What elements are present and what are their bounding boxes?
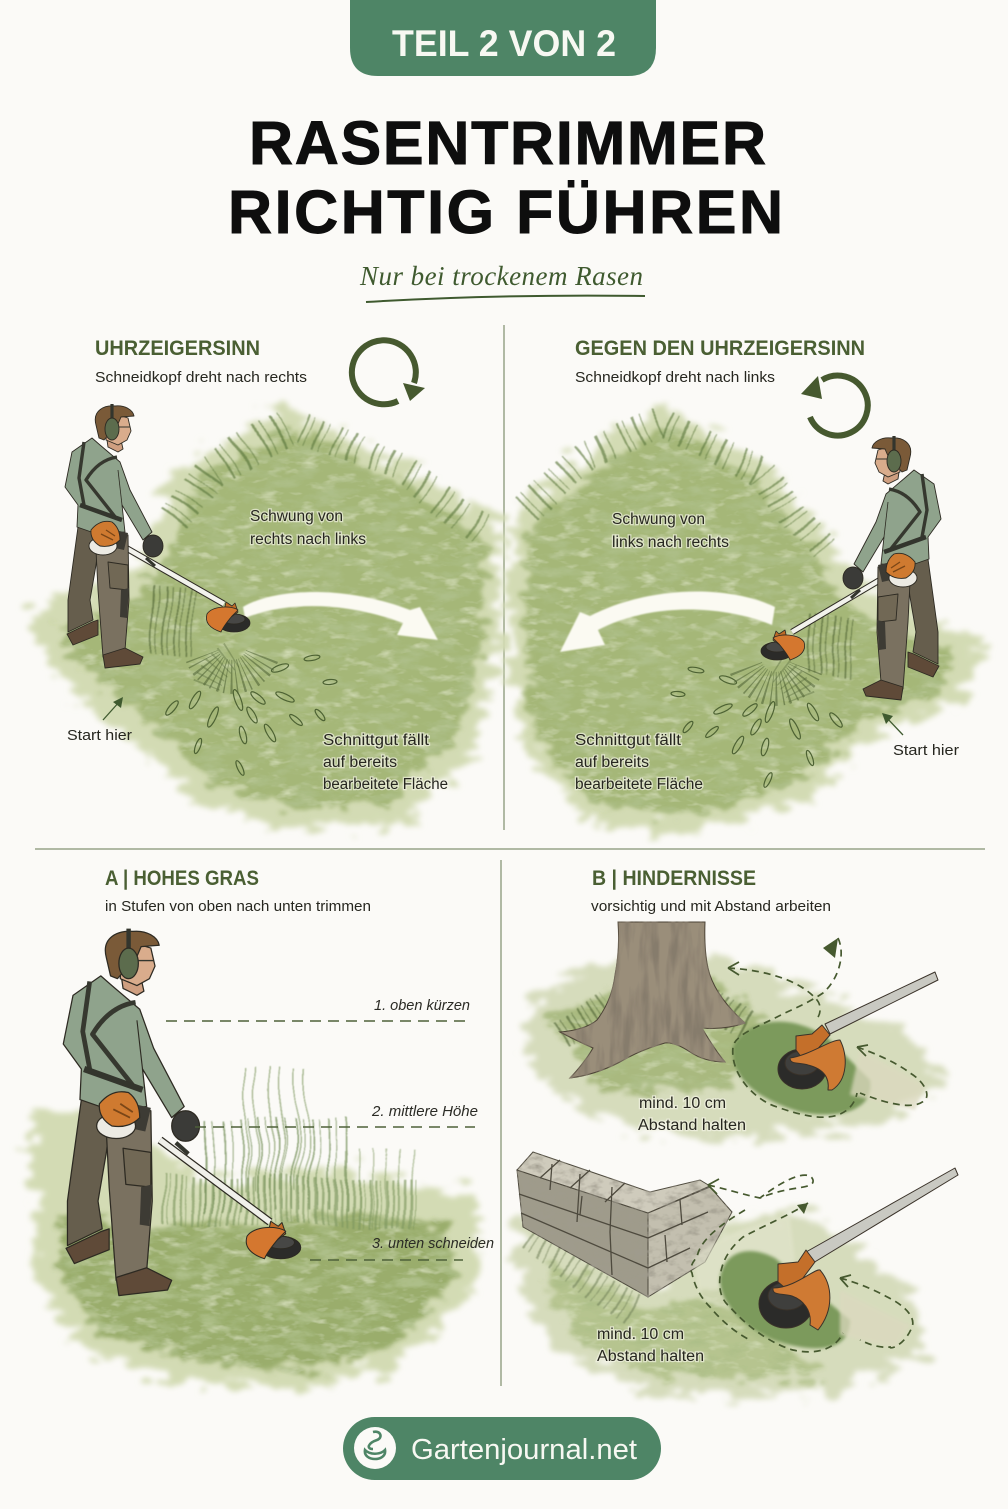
- lawn and tall grass: [30, 1105, 480, 1392]
- label: keep distance at wall: Abstand halten: [597, 1348, 704, 1365]
- label: clippings: auf bereits: [323, 754, 397, 771]
- label: keep distance at tree: [638, 1095, 746, 1134]
- paths around tree: [728, 938, 927, 1117]
- panel: A tall grass: [30, 867, 494, 1392]
- icon: counter-clockwise arrow: [801, 376, 868, 436]
- panel: Gegen den Uhrzeigersinn: [510, 337, 985, 835]
- heading: B obstacles: B | HINDERNISSE: [592, 867, 756, 890]
- step 1: top: 1. oben kürzen: [374, 997, 470, 1014]
- heading: Gegen den Uhrzeigersinn: GEGEN DEN UHRZEIGERSINN: [575, 337, 865, 360]
- label: keep distance at tree: mind. 10 cm: [639, 1095, 726, 1112]
- icon: clockwise arrow: [352, 340, 425, 404]
- label: swing: [250, 508, 366, 548]
- label: swing: rechts nach links: [250, 531, 366, 548]
- person with trimmer: [65, 404, 250, 668]
- header tab: part indicator: TEIL 2 VON 2: [392, 23, 616, 64]
- header tab: part indicator: [350, 0, 656, 76]
- illustration: tree obstacle: [525, 922, 945, 1140]
- label: clippings: Schnittgut fällt: [575, 732, 682, 749]
- heading: Uhrzeigersinn: UHRZEIGERSINN: [95, 337, 260, 360]
- person with trimmer: [63, 929, 301, 1296]
- step 2: middle: 2. mittlere Höhe: [371, 1103, 478, 1120]
- text: cutting head direction left: Schneidkopf dreht nach links: [575, 369, 775, 386]
- subtitle with hand-drawn underline: Nur bei trockenem Rasen: [359, 261, 643, 291]
- text: website: Gartenjournal.net: [411, 1434, 637, 1466]
- heading: A tall grass: A | HOHES GRAS: [105, 867, 259, 890]
- arrow: swing direction: [243, 592, 438, 640]
- title: RICHTIG FÜHREN: [228, 178, 783, 246]
- footer brand pill: [343, 1417, 661, 1480]
- label: clippings: [323, 732, 448, 793]
- label: start here with arrow: Start hier: [893, 742, 959, 759]
- label: keep distance at wall: [597, 1326, 704, 1365]
- title: RASENTRIMMER: [249, 109, 766, 177]
- label: keep distance at tree: Abstand halten: [638, 1117, 746, 1134]
- label: clippings: [575, 732, 703, 793]
- illustration: wall obstacle: [517, 1152, 925, 1395]
- label: swing: [612, 511, 729, 551]
- label: keep distance at wall: mind. 10 cm: [597, 1326, 684, 1343]
- panel: Uhrzeigersinn: [30, 337, 500, 830]
- arrow: swing direction: [560, 591, 775, 652]
- label: swing: links nach rechts: [612, 534, 729, 551]
- text: cutting head direction right: Schneidkopf dreht nach rechts: [95, 369, 307, 386]
- icon: plant logo: [354, 1427, 396, 1469]
- label: clippings: bearbeitete Fläche: [323, 776, 448, 793]
- label: start here with arrow: [882, 713, 959, 759]
- label: clippings: bearbeitete Fläche: [575, 776, 703, 793]
- label: swing: Schwung von: [612, 511, 705, 528]
- label: clippings: Schnittgut fällt: [323, 732, 430, 749]
- label: swing: Schwung von: [250, 508, 343, 525]
- label: start here with arrow: [67, 697, 132, 744]
- label: start here with arrow: Start hier: [67, 727, 132, 744]
- paths around wall: [691, 1175, 913, 1352]
- panel: B obstacles: [517, 867, 958, 1395]
- person with trimmer: [761, 436, 941, 700]
- trimmer at tree: [778, 972, 938, 1090]
- lawn area: [30, 408, 500, 830]
- text: work carefully with distance: vorsichtig und mit Abstand arbeiten: [591, 898, 831, 915]
- label: clippings: auf bereits: [575, 754, 649, 771]
- trimmer at wall: [759, 1168, 958, 1330]
- title: [228, 109, 783, 246]
- text: trim in steps: in Stufen von oben nach unten trimmen: [105, 898, 371, 915]
- step 3: bottom: 3. unten schneiden: [372, 1235, 494, 1252]
- lawn area: [510, 405, 985, 835]
